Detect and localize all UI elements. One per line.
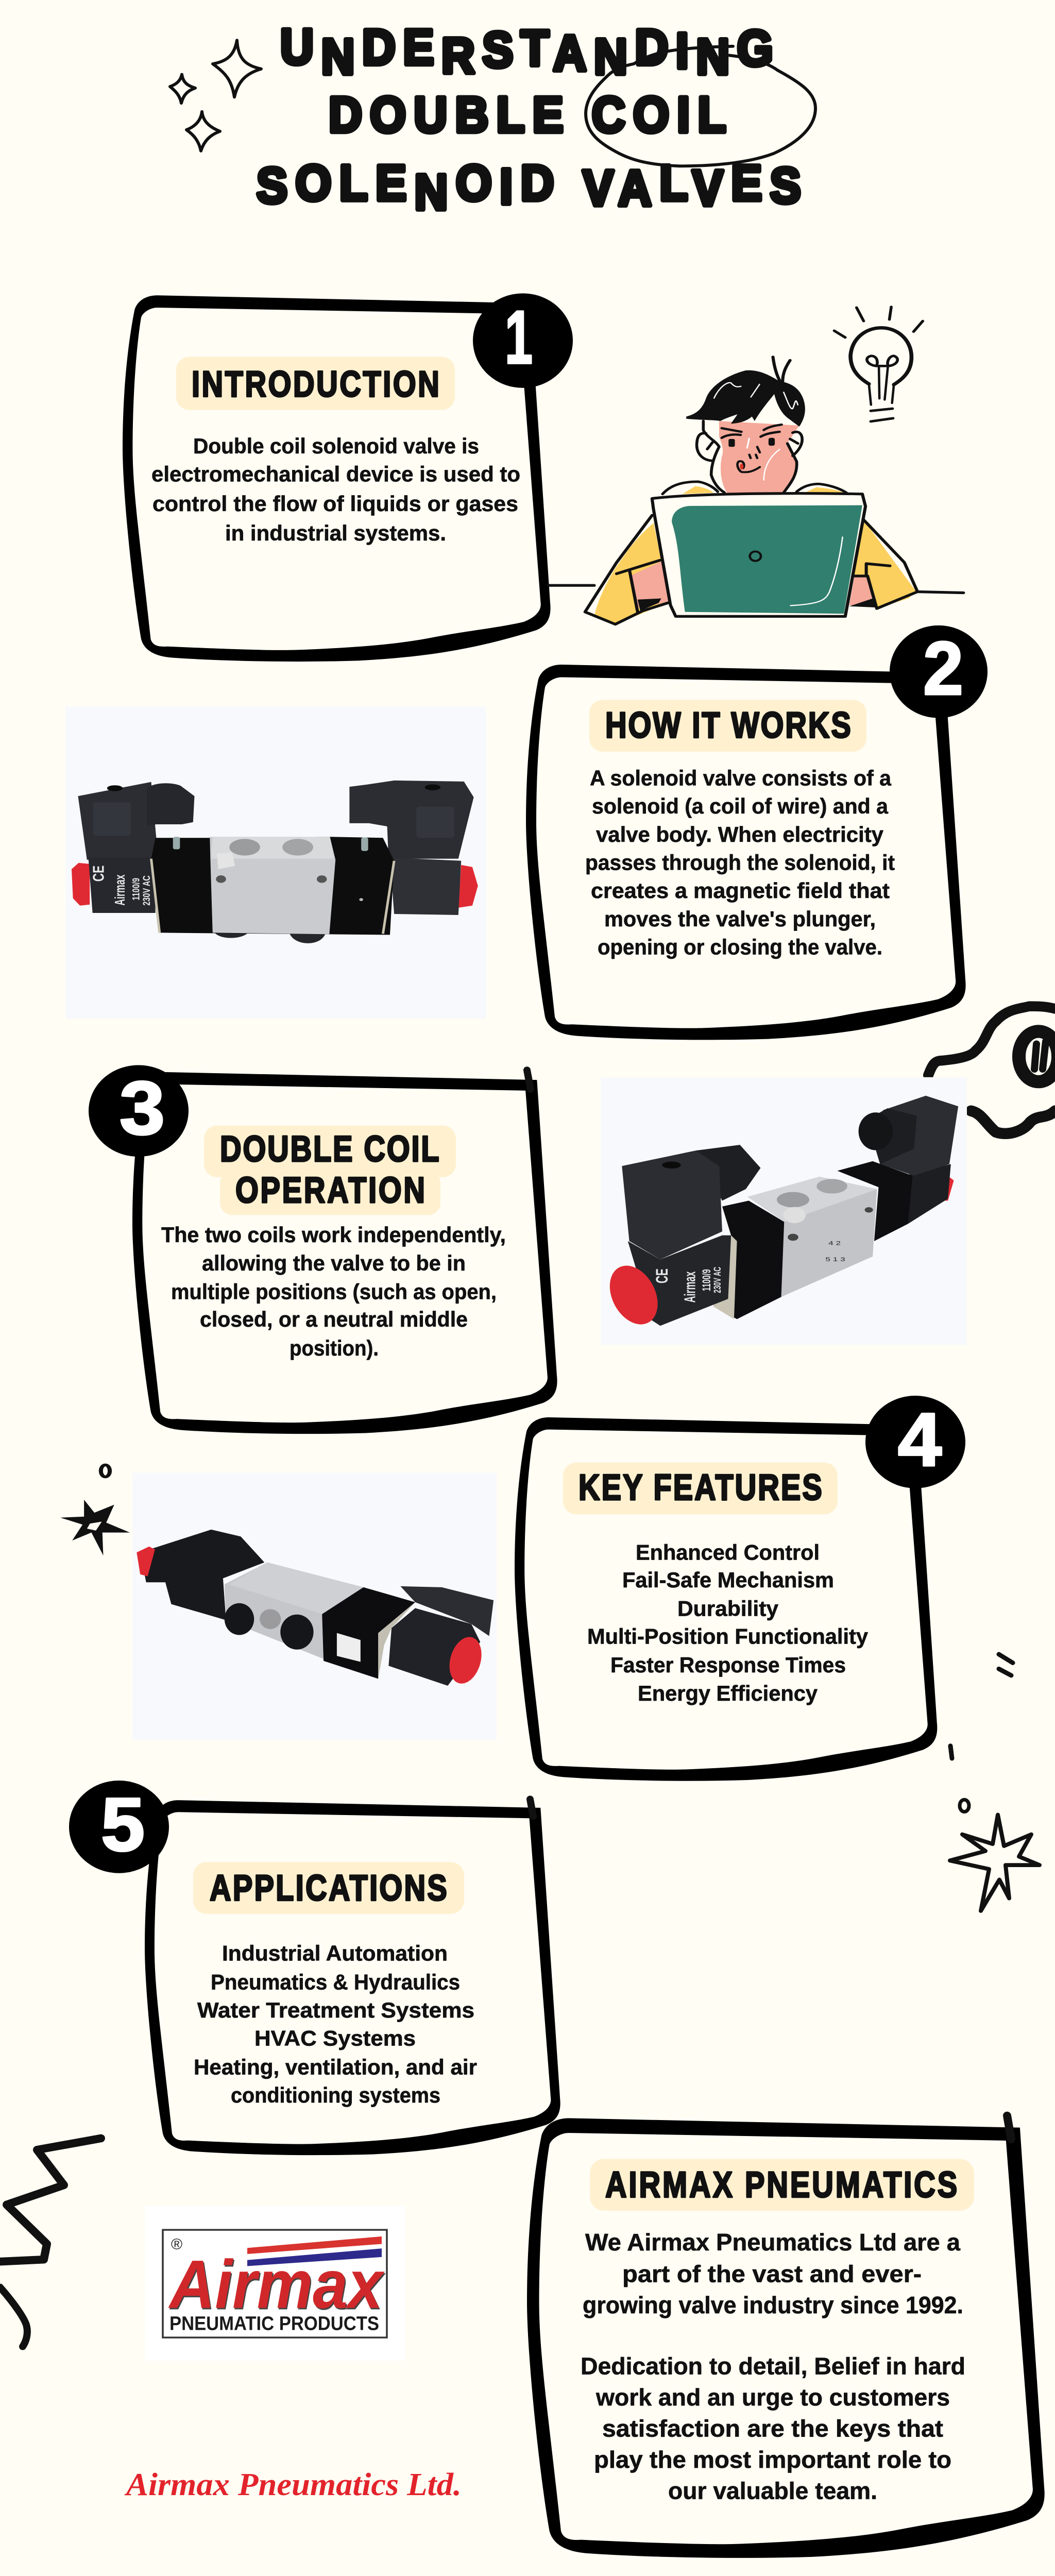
title: UNDERSTANDING [280, 19, 773, 84]
text: how it works body: creates a magnetic field that [591, 879, 890, 903]
text: key features list: Durability [677, 1597, 778, 1621]
text: how it works body: valve body. When electricity [596, 823, 883, 847]
decoration: small marks right [950, 1654, 1013, 1758]
photo: valve front view: 1100/9 [130, 878, 142, 901]
heading: double coil operation: DOUBLE COIL [220, 1128, 439, 1169]
text: how it works body [585, 767, 895, 959]
panel: airmax pneumatics [527, 2115, 1045, 2558]
decoration: star right [950, 1800, 1040, 1911]
text: double coil operation body: multiple positions (such as open, [171, 1280, 497, 1304]
text: introduction body: control the flow of liquids or gases [152, 493, 518, 516]
photo: valve angled view: Airmax [682, 1272, 699, 1303]
text: key features list: Multi-Position Functionality [587, 1625, 868, 1649]
number badge 5: 5 [101, 1783, 145, 1867]
number badge 5 [69, 1781, 169, 1873]
number badge 2: 2 [923, 626, 963, 710]
text: applications list: Heating, ventilation, and air [194, 2056, 477, 2079]
panel: double coil operation [89, 1065, 557, 1434]
icon: light bulb [834, 307, 923, 421]
text: how it works body: passes through the solenoid, it [585, 851, 895, 875]
logo: Airmax Pneumatic Products: PNEUMATIC PRODUCTS [169, 2313, 379, 2334]
text: applications list [194, 1942, 477, 2108]
text: company values: play the most important role to [594, 2447, 951, 2473]
number badge 4: 4 [898, 1398, 942, 1482]
text: company intro: part of the vast and ever- [622, 2261, 922, 2287]
text: how it works body: solenoid (a coil of wire) and a [592, 795, 888, 819]
text: applications list: HVAC Systems [254, 2027, 416, 2051]
photo: valve angled view: 1100/9 [700, 1269, 713, 1291]
heading: applications: APPLICATIONS [210, 1868, 447, 1908]
text: company values: our valuable team. [668, 2478, 877, 2504]
photo: valve angled view [601, 1077, 967, 1345]
title: DOUBLE COIL [329, 86, 726, 143]
text: key features list: Enhanced Control [636, 1541, 820, 1565]
laptop [652, 494, 865, 616]
text: company intro: We Airmax Pneumatics Ltd are a [585, 2229, 961, 2256]
decoration: black scribbles top right [928, 1006, 1055, 1133]
photo: valve front view: Airmax [112, 874, 128, 906]
panel: applications [69, 1781, 560, 2155]
text: applications list: Pneumatics & Hydraulics [211, 1971, 460, 1994]
heading: key features [563, 1463, 838, 1514]
logo: Airmax Pneumatic Products [145, 2206, 405, 2361]
text: double coil operation body: The two coils work independently, [161, 1224, 506, 1247]
text: how it works body: A solenoid valve consists of a [590, 767, 891, 790]
hand-drawn circle around COIL [586, 46, 815, 166]
title: SOLENOID VALVES [257, 155, 801, 220]
text: introduction body: Double coil solenoid valve is [193, 434, 479, 459]
text: company intro: growing valve industry since 1992. [583, 2292, 963, 2318]
photo: valve angled view: 4 2 [828, 1240, 841, 1247]
text: key features list: Energy Efficiency [638, 1682, 818, 1706]
number badge 2 [890, 625, 988, 718]
hair [686, 357, 805, 427]
number badge 3 [89, 1065, 189, 1157]
number badge 3: 3 [120, 1066, 165, 1150]
heading: airmax pneumatics: AIRMAX PNEUMATICS [605, 2164, 957, 2205]
heading: double coil operation [204, 1126, 456, 1215]
text: applications list: conditioning systems [231, 2083, 440, 2108]
heading: applications [193, 1862, 464, 1914]
photo: valve front view: CE [90, 866, 107, 882]
text: company values: satisfaction are the keys that [602, 2415, 943, 2442]
text: applications list: Industrial Automation [222, 1942, 448, 1966]
decoration: star left [60, 1465, 130, 1555]
text: double coil operation body: position). [290, 1336, 379, 1361]
photo: valve angled view: 5 1 3 [825, 1257, 845, 1263]
text: company values: work and an urge to customers [595, 2384, 950, 2411]
heading: key features: KEY FEATURES [578, 1467, 822, 1507]
photo: valve angled view: CE [652, 1268, 671, 1283]
heading: how it works: HOW IT WORKS [605, 705, 851, 745]
text: how it works body: moves the valve's plunger, [604, 907, 876, 931]
panel: introduction [123, 293, 573, 662]
text: double coil operation body: closed, or a neutral middle [200, 1308, 468, 1332]
text: applications list: Water Treatment Systems [197, 1998, 474, 2023]
photo: valve front view [65, 706, 486, 1019]
text: company values: Dedication to detail, Belief in hard [581, 2353, 965, 2379]
icon: sparkles [170, 40, 261, 151]
logo: Airmax Pneumatic Products: ® [171, 2236, 182, 2253]
logo: Airmax Pneumatic Products: Airmax [168, 2246, 385, 2323]
photo: valve angled view: 230V AC [712, 1267, 723, 1293]
photo: valve lying view [132, 1472, 497, 1740]
text: introduction body: in industrial systems. [225, 521, 446, 546]
text: key features list: Faster Response Times [610, 1654, 846, 1677]
text: how it works body: opening or closing the valve. [598, 936, 882, 959]
heading: double coil operation: OPERATION [235, 1170, 425, 1210]
panel: key features [515, 1396, 965, 1781]
number badge 1 [473, 293, 573, 388]
text: key features list [587, 1541, 868, 1706]
illustration: person at laptop [548, 357, 963, 624]
heading: introduction [176, 357, 455, 410]
photo: valve front view: 230V AC [141, 875, 152, 906]
text: company intro [583, 2229, 963, 2318]
panel: how it works [526, 625, 988, 1040]
brand script: Airmax Pneumatics Ltd.: Airmax Pneumatics Ltd. [124, 2466, 462, 2502]
title [257, 19, 801, 220]
heading: introduction: INTRODUCTION [192, 364, 439, 404]
number badge 1: 1 [505, 296, 533, 380]
heading: how it works [589, 700, 866, 752]
decoration: squiggle left [0, 2138, 101, 2347]
text: introduction body: electromechanical device is used to [151, 463, 520, 486]
text: double coil operation body [161, 1224, 506, 1361]
text: double coil operation body: allowing the valve to be in [202, 1251, 466, 1276]
text: introduction body [151, 434, 520, 546]
text: key features list: Fail-Safe Mechanism [622, 1568, 834, 1592]
face [697, 414, 802, 493]
text: company values [581, 2353, 965, 2504]
number badge 4 [865, 1396, 965, 1488]
